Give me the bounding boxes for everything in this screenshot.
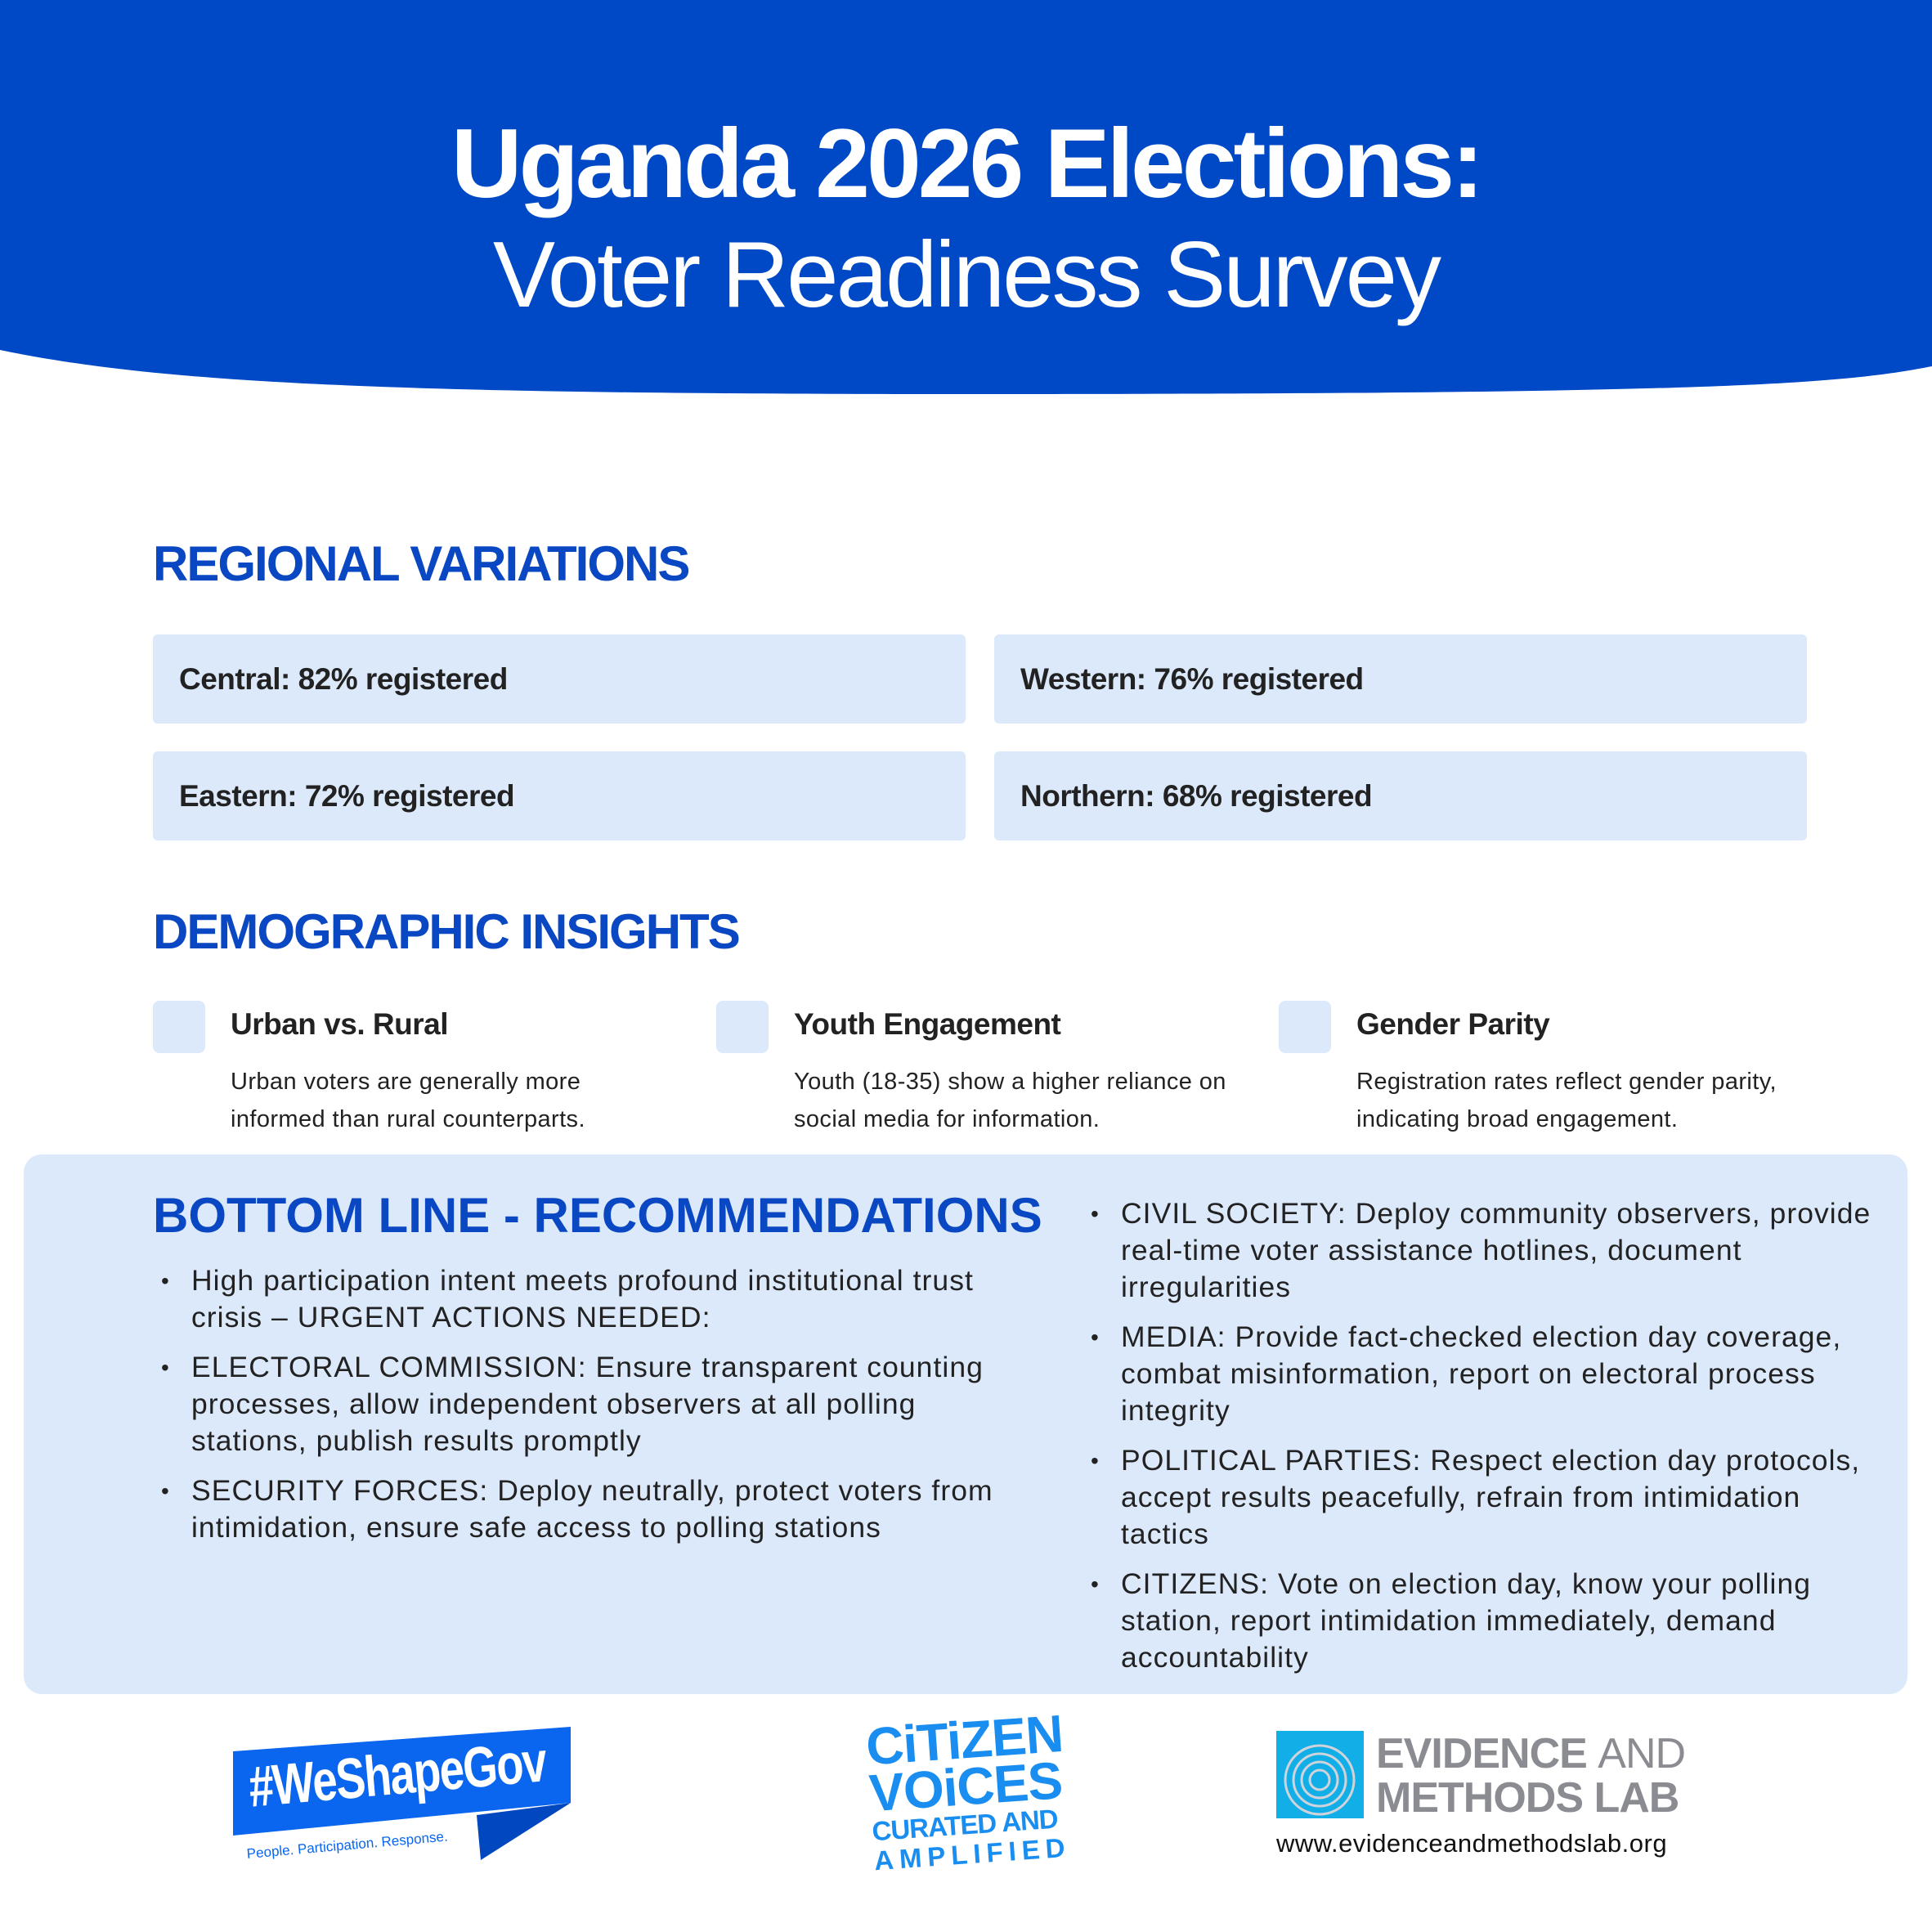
box: eastern <box>153 751 966 840</box>
right bullet list: CIVIL SOCIETY: Deploy community observers, provide real-time voter assistance hotlines, document irregularities <box>1121 1197 1871 1303</box>
box: central <box>153 634 966 724</box>
demographic: youth <box>716 1001 1226 1132</box>
regional boxes <box>153 634 1807 840</box>
demographic: youth: Youth (18-35) show a higher reliance on social media for information. <box>794 1069 1226 1132</box>
demographic: urban vs rural: Urban vs. Rural <box>231 1007 448 1041</box>
panel: recommendations <box>24 1154 1907 1694</box>
left bullet list: High participation intent meets profound institutional trust crisis – URGENT ACTIONS NEEDED: <box>191 1264 974 1334</box>
box: northern <box>994 751 1807 840</box>
heading: regional variations: REGIONAL VARIATIONS <box>153 536 688 591</box>
demographic: urban vs rural <box>153 1001 585 1132</box>
title: Uganda 2026 Elections: <box>451 109 1481 218</box>
left bullet list: ELECTORAL COMMISSION: Ensure transparent counting processes, allow independent observers at all polling stations, publish results promptly <box>191 1351 984 1457</box>
logo: WeShapeGov: #WeShapeGov <box>246 1729 549 1819</box>
logo: WeShapeGov: People. Participation. Response. <box>246 1829 448 1862</box>
logo: evidence and methods lab: www.evidenceandmethodslab.org <box>1276 1829 1667 1858</box>
heading: demographic insights: DEMOGRAPHIC INSIGHTS <box>153 904 739 959</box>
logo: evidence and methods lab: METHODS LAB <box>1376 1774 1679 1822</box>
logo: evidence and methods lab: EVIDENCE AND <box>1376 1730 1685 1777</box>
demographic: gender: Registration rates reflect gender parity, indicating broad engagement. <box>1356 1069 1777 1132</box>
logo: citizen voices <box>864 1704 1072 1876</box>
logo: citizen voices: CiTiZEN <box>864 1704 1065 1777</box>
demographic: gender <box>1279 1001 1777 1132</box>
logo: citizen voices: AMPLIFIED <box>873 1832 1072 1876</box>
heading: bottom line: BOTTOM LINE - RECOMMENDATIONS <box>153 1188 1042 1243</box>
logo: WeShapeGov <box>233 1727 571 1862</box>
left bullet list: SECURITY FORCES: Deploy neutrally, protect voters from intimidation, ensure safe access to polling stations <box>191 1474 993 1544</box>
header banner <box>0 0 1932 394</box>
box: western <box>994 634 1807 724</box>
box: central: Central: 82% registered <box>179 662 508 696</box>
right bullet list: CITIZENS: Vote on election day, know your polling station, report intimidation immediately, demand accountability <box>1121 1567 1811 1674</box>
left bullet list <box>162 1264 993 1544</box>
subtitle: Voter Readiness Survey <box>493 223 1439 327</box>
logo: evidence and methods lab <box>1276 1730 1685 1858</box>
icon: fingerprint <box>1276 1731 1364 1818</box>
box: western: Western: 76% registered <box>1020 662 1364 696</box>
demographic: urban vs rural: Urban voters are generally more informed than rural counterparts. <box>231 1069 585 1132</box>
demographic: youth: Youth Engagement <box>794 1007 1060 1041</box>
right bullet list: POLITICAL PARTIES: Respect election day protocols, accept results peacefully, refrain from intimidation tactics <box>1121 1444 1860 1550</box>
logo: citizen voices: VOiCES <box>867 1750 1064 1822</box>
logo: citizen voices: CURATED AND <box>871 1804 1059 1846</box>
right bullet list <box>1092 1197 1871 1674</box>
right bullet list: MEDIA: Provide fact-checked election day coverage, combat misinformation, report on electoral process integrity <box>1121 1320 1841 1427</box>
demographic: gender: Gender Parity <box>1356 1007 1549 1041</box>
box: northern: Northern: 68% registered <box>1020 779 1372 813</box>
box: eastern: Eastern: 72% registered <box>179 779 514 813</box>
